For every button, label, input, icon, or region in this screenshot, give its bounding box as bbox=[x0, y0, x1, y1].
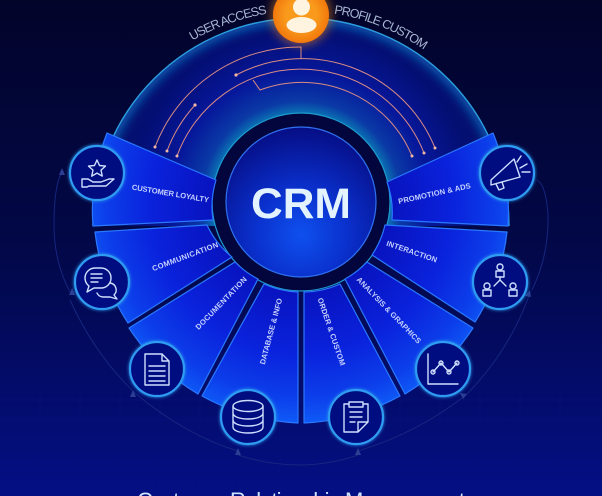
icon: promotion megaphone bbox=[480, 146, 534, 200]
icon: order clipboard bbox=[329, 390, 383, 444]
top arc band bbox=[93, 18, 509, 226]
panel: documentation bbox=[129, 262, 258, 394]
panel: customer loyalty bbox=[92, 133, 216, 226]
curved label: profile custom: PROFILE CUSTOM bbox=[334, 5, 428, 50]
icon: customer loyalty hand and star bbox=[70, 146, 124, 200]
label: communication: COMMUNICATION bbox=[151, 240, 219, 273]
label: documentation: DOCUMENTATION bbox=[194, 275, 249, 332]
hub title: CRM bbox=[251, 180, 351, 228]
panel: promotion and ads bbox=[387, 133, 508, 226]
label: customer loyalty: CUSTOMER LOYALTY bbox=[131, 183, 210, 204]
icon: analysis line graph bbox=[416, 342, 470, 396]
icon: interaction network of people bbox=[473, 255, 527, 309]
icon: orange user avatar bbox=[271, 0, 331, 45]
label: promotion and ads: PROMOTION & ADS bbox=[397, 181, 472, 206]
panel: order and custom bbox=[304, 284, 400, 423]
curved label: user access: USER ACCESS bbox=[188, 6, 266, 40]
label: order and custom: ORDER & CUSTOM bbox=[316, 297, 347, 367]
panel: analysis and graphics bbox=[345, 262, 473, 394]
central hub bbox=[212, 113, 390, 291]
orbit connector arcs with arrowheads bbox=[54, 168, 548, 465]
label: interaction: INTERACTION bbox=[385, 239, 438, 264]
icon: database cylinders bbox=[221, 390, 275, 444]
icon: documentation page bbox=[130, 342, 184, 396]
label: analysis and graphics: ANALYSIS & GRAPHICS bbox=[355, 275, 423, 345]
orange circuit lines bbox=[154, 47, 436, 157]
label: database and info: DATABASE & INFO bbox=[258, 297, 284, 365]
panel: database and info bbox=[202, 284, 298, 423]
panel: communication bbox=[95, 225, 232, 323]
panel: interaction bbox=[372, 225, 507, 322]
icon: communication speech bubbles bbox=[75, 255, 129, 309]
